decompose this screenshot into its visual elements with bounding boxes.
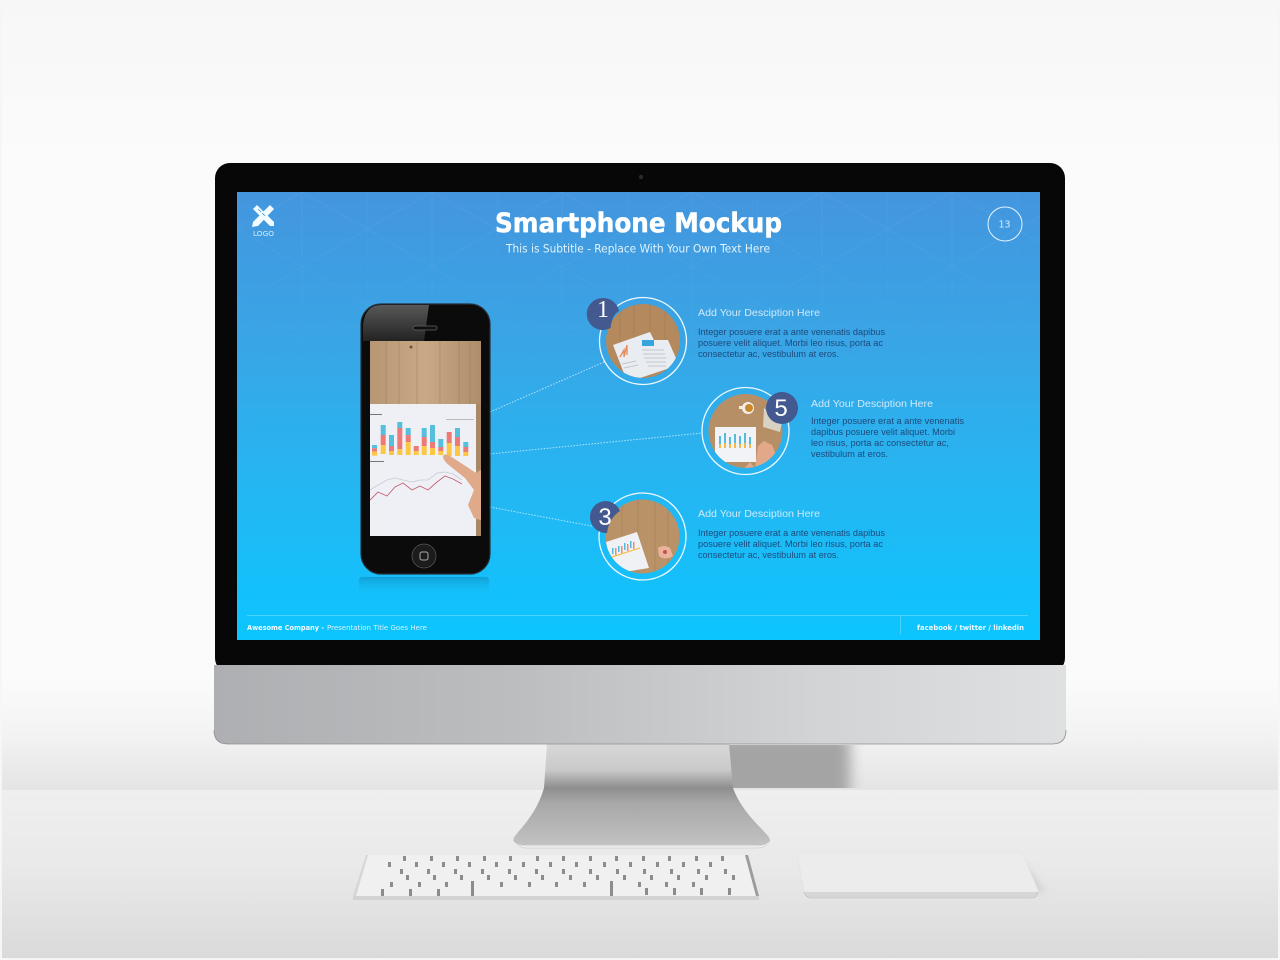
- footer presentation title: Presentation Title Goes Here: [327, 624, 427, 632]
- chart legend and headings: [370, 414, 474, 462]
- line chart: [370, 472, 462, 500]
- pointing hand: [443, 454, 481, 520]
- stacked bar chart: [372, 422, 468, 456]
- phone screen photo: [370, 341, 481, 536]
- desk surface: [0, 790, 1280, 960]
- footer: [247, 616, 1028, 634]
- number badge: [766, 392, 798, 424]
- description: [698, 508, 885, 560]
- description: [698, 307, 885, 359]
- ring: [599, 493, 686, 580]
- background triangle pattern: [237, 192, 1040, 234]
- smartphone mockup: [361, 304, 490, 574]
- description: vestibulum at eros.: [811, 449, 888, 459]
- description: posuere velit aliquet. Morbi leo risus, porta ac: [698, 338, 884, 348]
- paper sheet: [370, 404, 476, 536]
- footer company: Awesome Company -: [247, 624, 324, 632]
- step 3: [590, 493, 885, 580]
- number badge: [590, 501, 620, 533]
- description: Integer posuere erat a ante venenatis: [811, 416, 965, 426]
- photo: desk with coffee: [708, 394, 783, 470]
- presentation slide: [237, 192, 1040, 640]
- keyboard body: [353, 855, 759, 899]
- webcam: [639, 175, 643, 179]
- phone reflection: [359, 577, 489, 595]
- footer social links: facebook / twitter / linkedin: [917, 624, 1024, 632]
- monitor: [214, 163, 1066, 744]
- page number badge: 13: [998, 220, 1011, 230]
- logo: [252, 205, 274, 238]
- keyboard: [353, 855, 759, 900]
- number badge: 5: [774, 395, 788, 422]
- slide background: [237, 192, 1040, 640]
- monitor bezel: [215, 163, 1065, 673]
- wood backdrop: [370, 341, 481, 536]
- monitor chin: [214, 665, 1066, 744]
- description: dapibus posuere velit aliquet. Morbi: [811, 427, 955, 437]
- phone speaker: [413, 326, 437, 330]
- phone home button: [412, 544, 436, 568]
- monitor stand: [513, 744, 770, 848]
- ring: [702, 388, 789, 474]
- title: Smartphone Mockup: [495, 208, 782, 239]
- keyboard side edges: [353, 855, 368, 896]
- number badge: 1: [597, 297, 609, 323]
- logo icon: crossed pencil and ruler: [252, 205, 274, 227]
- photo: documents on wood: [606, 304, 680, 378]
- trackpad soft shadow: [1020, 860, 1046, 892]
- description: Add Your Desciption Here: [698, 307, 820, 319]
- phone gloss: [363, 305, 429, 341]
- description: Add Your Desciption Here: [811, 398, 933, 410]
- key gaps: [381, 856, 735, 896]
- description: Integer posuere erat a ante venenatis dapibus: [698, 327, 885, 337]
- number badge: 3: [598, 504, 612, 531]
- ring: [600, 298, 686, 384]
- photo: chart on wood: [605, 499, 680, 574]
- description: posuere velit aliquet. Morbi leo risus, porta ac: [698, 539, 884, 549]
- subtitle: This is Subtitle - Replace With Your Own Text Here: [505, 242, 770, 256]
- page number badge: [988, 207, 1022, 241]
- description: consectetur ac, vestibulum at eros.: [698, 550, 839, 560]
- phone body: [361, 304, 490, 574]
- number badge: [587, 297, 619, 330]
- connector lines: [490, 362, 702, 527]
- description: leo risus, porta ac consectetur ac,: [811, 438, 949, 448]
- logo caption: LOGO: [253, 230, 274, 238]
- step 1: [587, 297, 885, 384]
- description: Add Your Desciption Here: [698, 508, 820, 520]
- description: consectetur ac, vestibulum at eros.: [698, 349, 839, 359]
- step 5: [702, 388, 965, 474]
- stand shadow on wall: [729, 745, 858, 788]
- description: Integer posuere erat a ante venenatis dapibus: [698, 528, 885, 538]
- description: [811, 398, 965, 459]
- trackpad: [797, 853, 1046, 898]
